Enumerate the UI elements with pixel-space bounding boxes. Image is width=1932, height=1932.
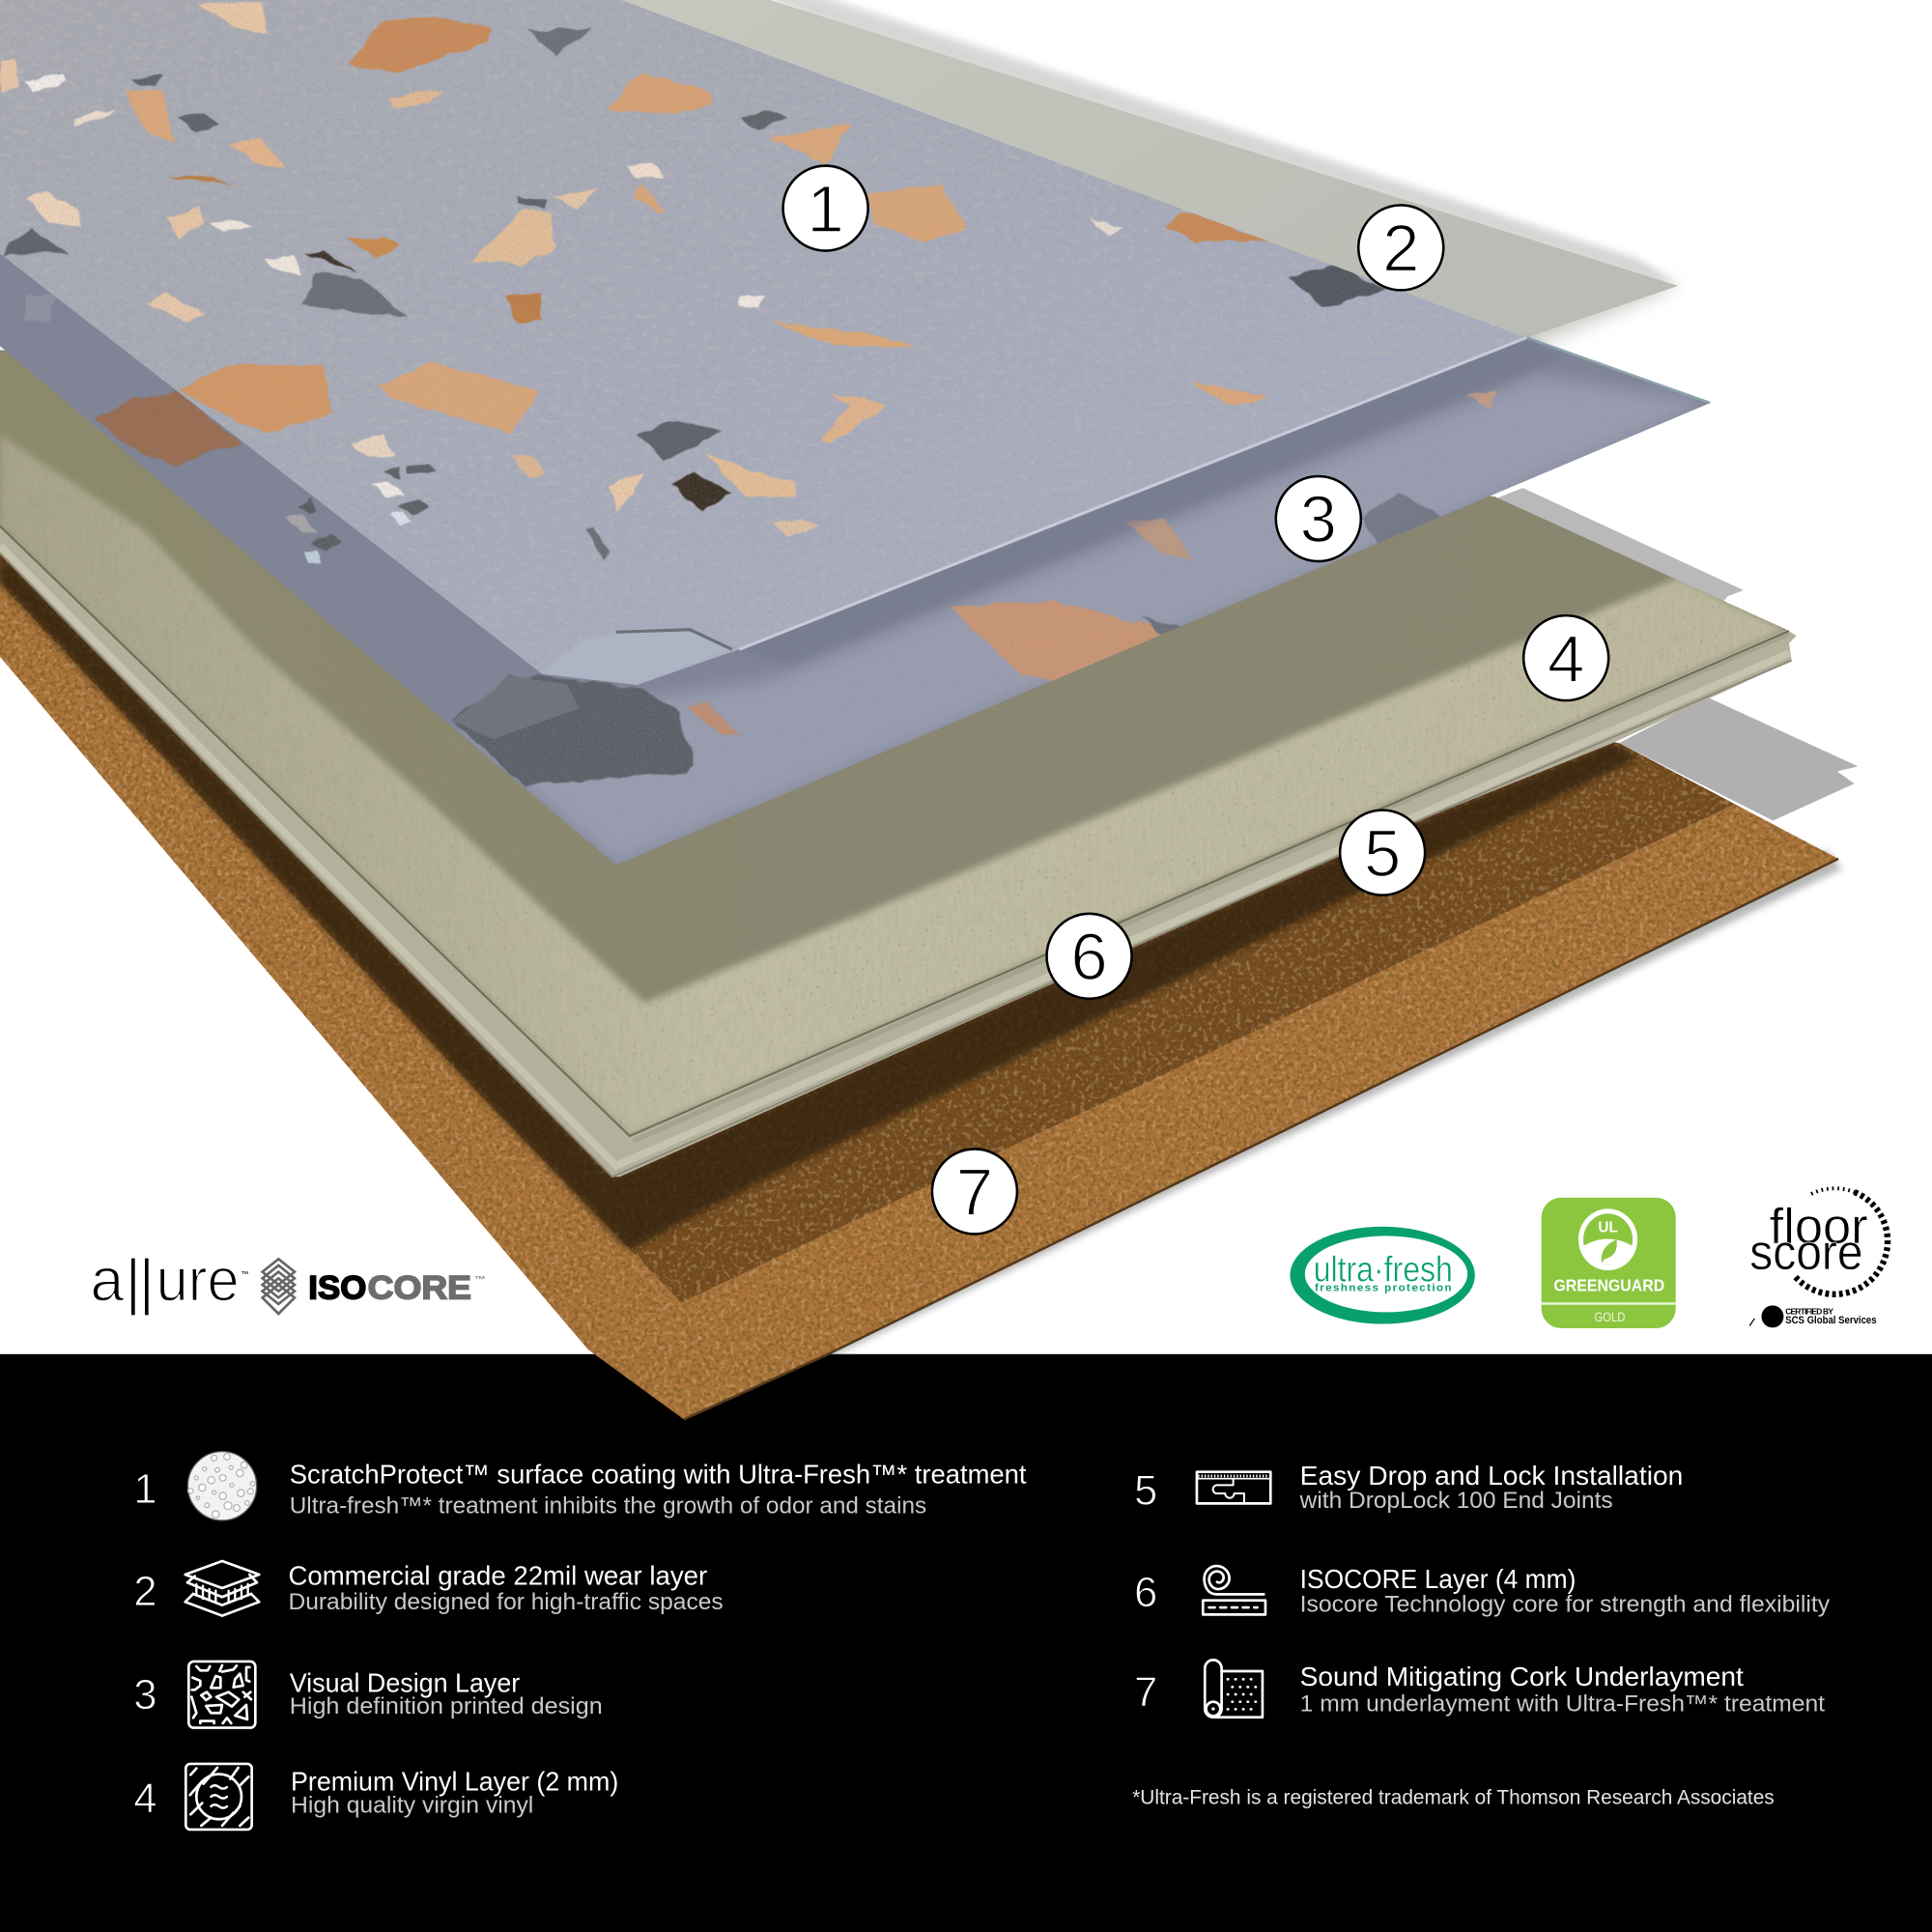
marker 2: 2 [1382, 212, 1419, 286]
layer 4, 5 and 6: plank body [0, 350, 1799, 1177]
layer 7: cork underlayment [0, 542, 1848, 1423]
logo: isocore mark [263, 1259, 295, 1314]
icon: terrazzo pattern [188, 1662, 255, 1728]
logo: allure: a [90, 1247, 125, 1315]
logo: allure: ™ [241, 1270, 249, 1279]
legend text 6: ISOCORE Layer (4 mm) [1300, 1564, 1576, 1594]
legend text 6 [1300, 1564, 1830, 1616]
legend text 7: Sound Mitigating Cork Underlayment [1300, 1662, 1744, 1691]
legend text 7: 1 mm underlayment with Ultra-Fresh™* treatment [1300, 1691, 1825, 1717]
icon: isocore roll [1203, 1566, 1265, 1614]
logo: isocore wordmark: CORE [368, 1270, 471, 1307]
layer 2: wear layer [622, 0, 1678, 350]
legend text 5 [1299, 1461, 1683, 1513]
layer 3: visual design layer [0, 246, 1725, 875]
legend text 4 [291, 1766, 618, 1817]
legend number 7: 7 [1134, 1670, 1157, 1717]
legend text 2: Commercial grade 22mil wear layer [288, 1560, 707, 1590]
legend text 5: with DropLock 100 End Joints [1299, 1488, 1613, 1513]
shadow: above wear layer [770, 0, 1678, 286]
legend number 5: 5 [1134, 1467, 1157, 1514]
legend number 4: 4 [133, 1776, 157, 1822]
legend text 1 [290, 1460, 1027, 1518]
badge: greenguard gold: UL [1598, 1220, 1618, 1236]
badge: greenguard gold: GREENGUARD [1553, 1276, 1664, 1295]
marker 2 [1358, 205, 1443, 290]
marker 4 [1523, 615, 1608, 700]
legend text 2: Durability designed for high-traffic spaces [288, 1589, 724, 1614]
marker 1 [783, 166, 868, 251]
logo: allure [90, 1247, 249, 1315]
legend number 2: 2 [133, 1569, 157, 1615]
legend text 3: High definition printed design [290, 1693, 603, 1719]
marker 3: 3 [1300, 482, 1337, 556]
legend text 4: High quality virgin vinyl [291, 1792, 533, 1817]
footnote: *Ultra-Fresh is a registered trademark of Thomson Research Associates [1132, 1786, 1775, 1808]
logo: isocore wordmark [308, 1270, 486, 1307]
marker 7: 7 [956, 1155, 993, 1230]
badge: floorscore: floor [1770, 1199, 1868, 1255]
legend text 1: ScratchProtect™ surface coating with Ultra-Fresh™* treatment [290, 1460, 1027, 1490]
badge: greenguard gold: GOLD [1595, 1310, 1626, 1324]
icon: stacked wear layer [185, 1561, 259, 1616]
legend number 6: 6 [1134, 1570, 1157, 1616]
logo: isocore wordmark: ™ [474, 1275, 486, 1284]
panel: black legend band [0, 1354, 1932, 1932]
legend text 1: Ultra-fresh™* treatment inhibits the growth of odor and stains [290, 1492, 926, 1518]
icon: drop and lock joint [1197, 1472, 1270, 1503]
marker 6: 6 [1070, 920, 1108, 994]
badge: floorscore: SCS Global Services [1785, 1315, 1877, 1326]
badge: floorscore: score [1749, 1225, 1863, 1281]
layer 1 front edge highlight [739, 337, 1526, 649]
marker 4: 4 [1548, 621, 1584, 696]
badge: ultra-fresh: freshness protection [1315, 1283, 1452, 1294]
layer 1: terrazzo surface with ScratchProtect coating [0, 0, 1534, 690]
legend text 3: Visual Design Layer [290, 1667, 520, 1697]
marker 7 [932, 1149, 1017, 1234]
icon: vinyl layer [185, 1764, 252, 1830]
marker 6 [1047, 914, 1132, 999]
badge: ultra-fresh [1290, 1227, 1475, 1324]
legend number 3: 3 [133, 1672, 157, 1719]
legend text 6: Isocore Technology core for strength and flexibility [1300, 1591, 1830, 1616]
badge: floorscore: CERTIFIED BY [1785, 1306, 1833, 1316]
legend text 4: Premium Vinyl Layer (2 mm) [291, 1766, 618, 1796]
icon: coating droplets [187, 1452, 257, 1520]
shadow: cork underlayment edge [764, 850, 1842, 1378]
legend text 3 [290, 1667, 603, 1719]
shadow: gray layer offsets behind plank [1479, 488, 1858, 820]
logo: allure: ure [156, 1247, 240, 1315]
badge: floorscore [1749, 1188, 1888, 1327]
badge: ultra-fresh: ultra·fresh [1314, 1250, 1453, 1290]
legend text 5: Easy Drop and Lock Installation [1300, 1461, 1683, 1491]
icon: cork roll [1205, 1660, 1263, 1718]
marker 3 [1276, 476, 1361, 561]
legend text 7 [1300, 1662, 1825, 1717]
logo: isocore wordmark: ISO [308, 1270, 366, 1307]
legend number 1: 1 [133, 1466, 157, 1513]
marker 5 [1340, 810, 1425, 895]
marker 1: 1 [807, 172, 844, 246]
panel: white background [0, 0, 1932, 1355]
badge: greenguard gold [1542, 1198, 1676, 1328]
legend text 2 [288, 1560, 724, 1614]
shadow: top layer on design layer [739, 337, 1565, 666]
marker 5: 5 [1364, 816, 1401, 891]
